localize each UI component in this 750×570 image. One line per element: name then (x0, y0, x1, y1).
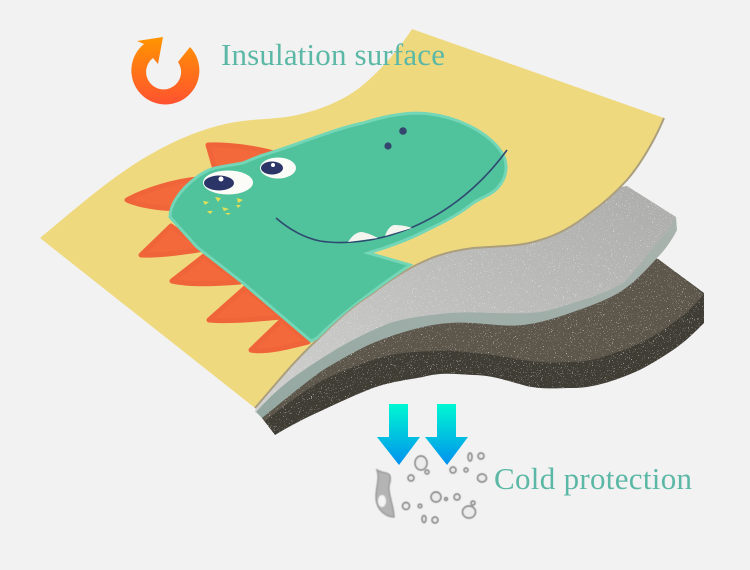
heading: insulation surface: Insulation surface (221, 37, 445, 72)
arrow: right cold arrow (425, 404, 468, 465)
heading: cold protection: Cold protection (494, 461, 692, 496)
layer: dark foam base (262, 250, 704, 435)
dinosaur head and body (170, 113, 506, 341)
dinosaur nostrils (384, 127, 407, 150)
dinosaur freckles (203, 197, 243, 215)
icon: water droplets (376, 453, 486, 523)
layer: grey foam top (255, 186, 676, 413)
dinosaur right eye (260, 158, 296, 178)
infographic: layered mat cross-section (40, 29, 704, 524)
dinosaur left eye (203, 170, 253, 194)
icon: orange circular arrow (131, 37, 199, 104)
panel: layered mat (40, 29, 704, 435)
layer: grey foam side (255, 217, 677, 418)
dinosaur spikes (127, 145, 308, 351)
dinosaur mouth (276, 150, 507, 243)
peel edge (255, 118, 664, 408)
layer: yellow top sheet (40, 29, 664, 408)
arrow: left cold arrow (377, 404, 420, 465)
dinosaur teeth (348, 225, 412, 242)
illustration: dinosaur (127, 113, 507, 351)
